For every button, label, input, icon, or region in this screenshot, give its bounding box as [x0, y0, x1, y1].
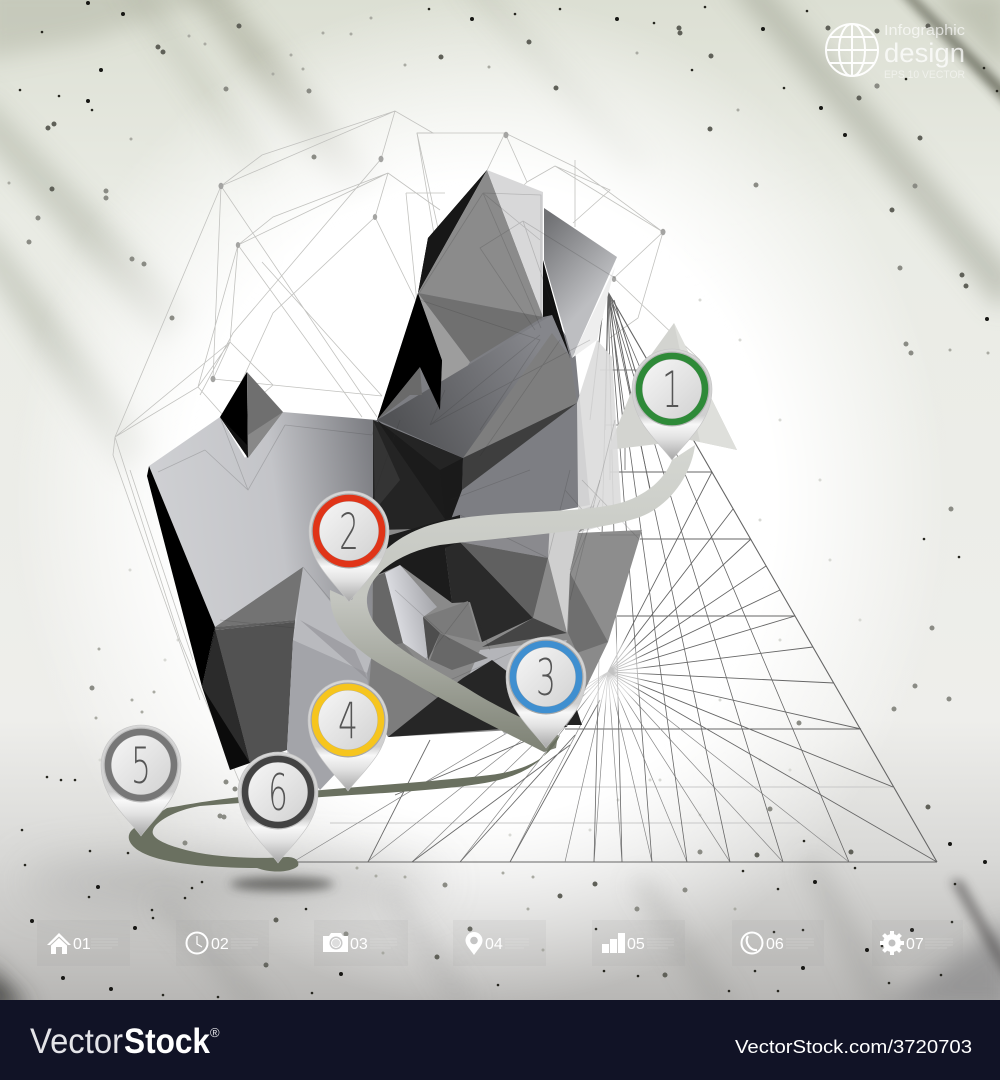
logo text: EPS 10 VECTOR: [884, 69, 965, 81]
pin 1: [632, 349, 712, 460]
pin 5: [101, 725, 181, 836]
nav item 02: 02: [211, 936, 229, 953]
nav item 05: [592, 920, 685, 966]
polygon shape: upper tower: [373, 170, 622, 580]
nav item 06: 06: [766, 936, 784, 953]
nav item 07: 07: [906, 936, 924, 953]
mesh nodes: [210, 132, 666, 382]
footer bar: Stock: [124, 1022, 210, 1061]
nav item 04: 04: [485, 936, 503, 953]
polygon shape: central cluster: [368, 505, 642, 737]
pin 2: [309, 491, 389, 602]
nav item 03: [314, 920, 408, 966]
thin ribbon loop: [129, 735, 560, 872]
nav item 01: [37, 920, 130, 966]
logo text: [884, 22, 966, 81]
nav item 03: 03: [350, 936, 368, 953]
logo: globe icon: [826, 24, 878, 76]
pyramid wireframe: [293, 292, 937, 862]
pin 3: [506, 637, 586, 748]
pin 6: 6: [268, 763, 288, 822]
pin 6: [238, 752, 318, 863]
pin 3: 3: [536, 648, 556, 707]
logo text: Infographic: [884, 22, 966, 39]
nav item 04: [453, 920, 546, 966]
footer bar: ®: [210, 1025, 220, 1040]
polygon shape: lower left block: [147, 372, 377, 800]
nav item 05: 05: [627, 936, 645, 953]
pin 1: 1: [662, 360, 682, 419]
pin 5: 5: [131, 736, 151, 795]
footer bar: [0, 1000, 1000, 1080]
triangles behind pin 1: [608, 323, 737, 450]
nav item 06: [732, 920, 824, 966]
pin 4: 4: [338, 691, 358, 750]
logo text: design: [884, 38, 965, 68]
footer bar: Vector: [30, 1022, 123, 1061]
footer bar: VectorStock.com/3720703: [735, 1036, 972, 1057]
wireframe mesh behind the shapes: [113, 111, 700, 783]
pin 4: [308, 680, 388, 791]
nav item 01: 01: [73, 936, 91, 953]
winding ribbon: [330, 445, 695, 752]
nav item 07: [872, 920, 963, 966]
mesh lines over the shapes: [158, 193, 640, 700]
pin 2: 2: [339, 502, 359, 561]
nav item 02: [176, 920, 269, 966]
